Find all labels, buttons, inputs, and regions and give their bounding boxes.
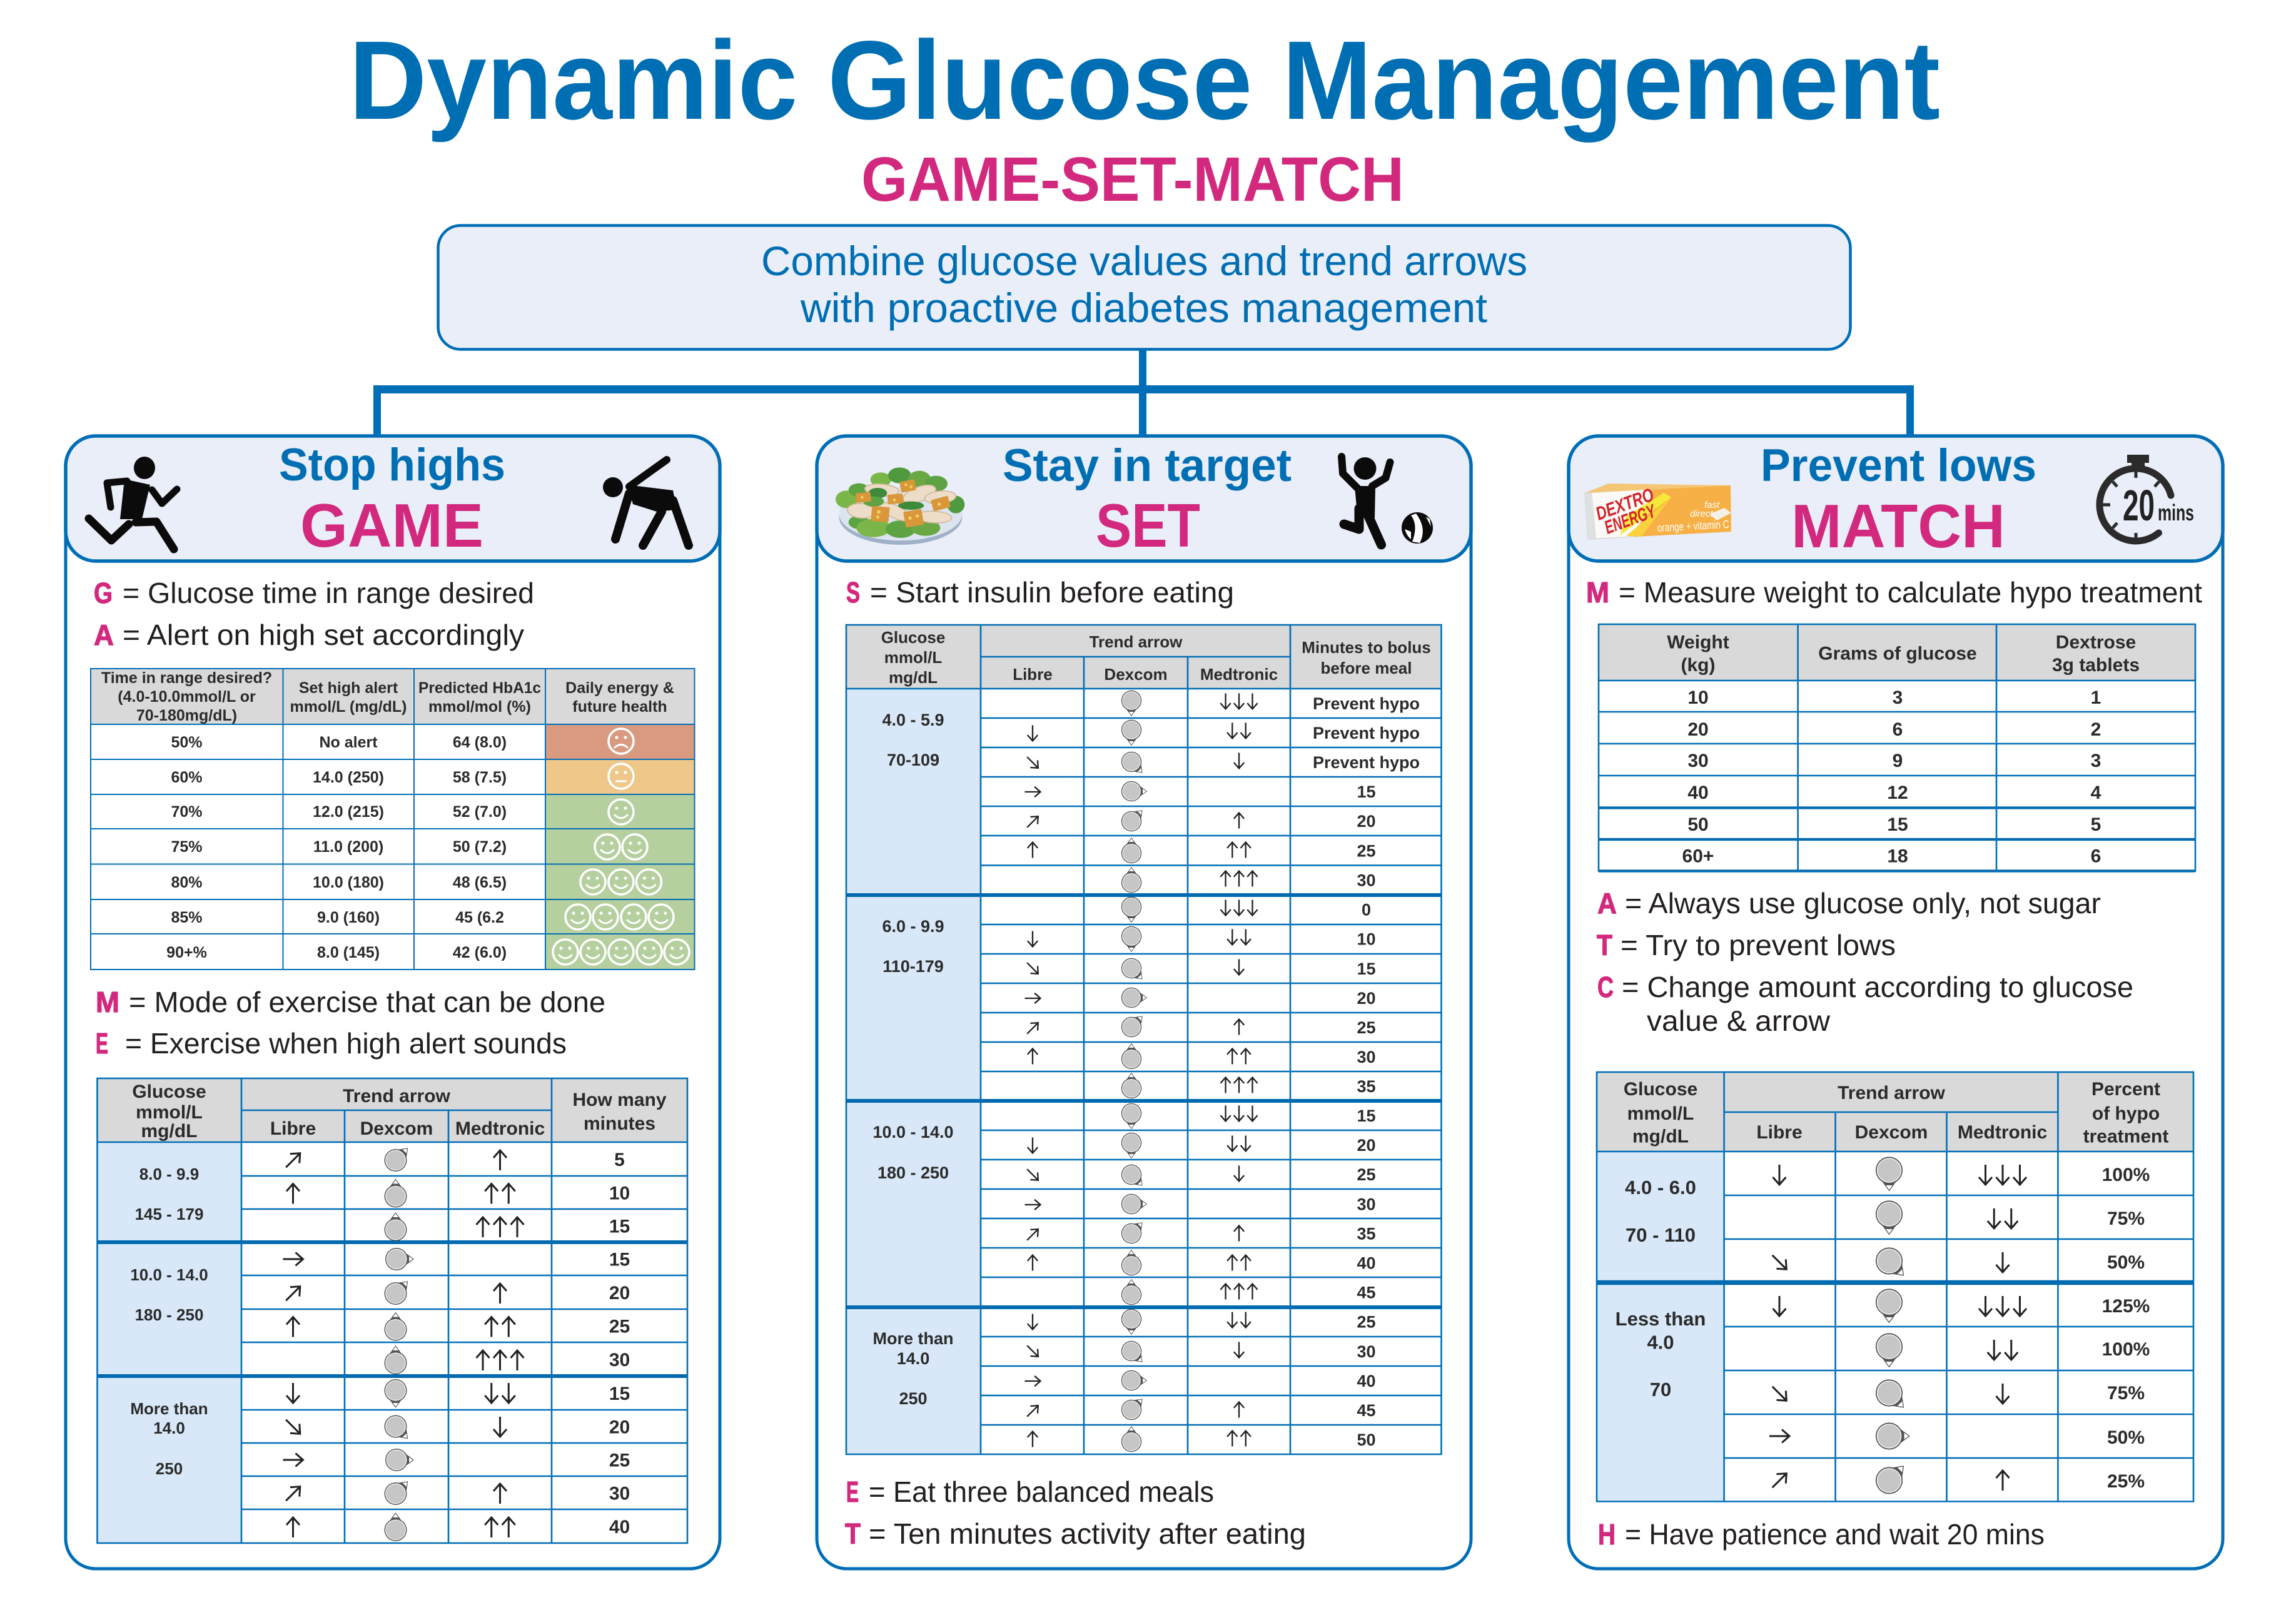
table: how many minutes: 25 bbox=[609, 1450, 630, 1471]
table: minutes to bolus: More than bbox=[872, 1329, 954, 1348]
table: minutes to bolus: 25 bbox=[1357, 1165, 1376, 1184]
icon: 20 minute stopwatch: mins bbox=[2158, 500, 2194, 525]
table: percent of hypo treatment: 4.0 bbox=[1647, 1331, 1674, 1354]
table: how many minutes: Dexcom bbox=[360, 1118, 433, 1139]
line: C: = Change amount according to glucose bbox=[1622, 971, 2133, 1003]
heading: MATCH: MATCH bbox=[1791, 492, 2005, 560]
table: minutes to bolus: mmol/L bbox=[884, 648, 942, 667]
heading: prevent lows: Prevent lows bbox=[1761, 440, 2036, 491]
table: time in range: 9.0 (160) bbox=[317, 909, 380, 926]
panel frame bbox=[817, 436, 1471, 1569]
table: minutes to bolus: 15 bbox=[1357, 1106, 1376, 1125]
line: S: = Start insulin before eating bbox=[870, 576, 1234, 609]
icon: salad plate bbox=[836, 467, 964, 545]
banner: combine glucose values: Combine glucose values and trend arrows bbox=[761, 238, 1527, 284]
line: E: = Eat three balanced meals bbox=[869, 1476, 1214, 1508]
table: weight and glucose: 6 bbox=[1893, 719, 1903, 740]
icon: neutral face bbox=[609, 764, 634, 789]
table: minutes to bolus: Trend arrow bbox=[1090, 632, 1183, 651]
icon: sad face bbox=[609, 729, 634, 754]
icon: dextro energy pack: fast bbox=[1704, 500, 1720, 510]
heading: stop highs: Stop highs bbox=[279, 440, 505, 490]
table: minutes to bolus: 250 bbox=[899, 1389, 928, 1408]
table: minutes to bolus: 30 bbox=[1357, 1342, 1376, 1361]
table: percent of hypo treatment: Glucose bbox=[1624, 1079, 1697, 1100]
table: minutes to bolus: 40 bbox=[1357, 1372, 1376, 1390]
icons: dexcom trend dials bbox=[1117, 691, 1150, 1452]
heading: GAME: GAME bbox=[300, 491, 483, 560]
table: minutes to bolus: 10.0 - 14.0 bbox=[872, 1123, 954, 1142]
table: percent of hypo treatment: treatment bbox=[2083, 1126, 2168, 1147]
line: M: = Mode of exercise that can be done bbox=[129, 986, 605, 1018]
table: percent of hypo treatment: 75% bbox=[2107, 1208, 2145, 1229]
table: time in range: mmol/mol (%) bbox=[428, 698, 531, 716]
icons: medtronic arrows bbox=[1979, 1165, 2026, 1491]
panel frame bbox=[66, 436, 720, 1569]
table: percent of hypo treatment: 125% bbox=[2102, 1296, 2150, 1317]
panel frame bbox=[1569, 436, 2223, 1569]
table: how many minutes: Libre bbox=[270, 1118, 316, 1139]
banner: combine glucose values bbox=[438, 225, 1850, 349]
table: time in range bbox=[91, 669, 694, 970]
table: minutes to bolus: before meal bbox=[1321, 659, 1412, 677]
table: minutes to bolus: 25 bbox=[1357, 1312, 1376, 1331]
table: weight and glucose: 2 bbox=[2091, 719, 2101, 740]
connector tree bbox=[373, 349, 1914, 436]
table: percent of hypo treatment: Percent bbox=[2091, 1079, 2160, 1100]
table: minutes to bolus: Prevent hypo bbox=[1313, 753, 1420, 772]
icons: libre arrows bbox=[1023, 726, 1042, 1447]
heading: SET: SET bbox=[1096, 491, 1200, 560]
icon: runner bbox=[89, 457, 177, 549]
table: percent of hypo treatment: 50% bbox=[2107, 1252, 2145, 1273]
table: minutes to bolus: 180 - 250 bbox=[877, 1163, 949, 1182]
table: time in range: 70% bbox=[171, 803, 203, 821]
panel: SET stay in target bbox=[817, 436, 1471, 1569]
table: minutes to bolus: Dexcom bbox=[1104, 665, 1168, 684]
table: time in range: 10.0 (180) bbox=[313, 874, 384, 891]
heading: stay in target: Stay in target bbox=[1003, 440, 1292, 491]
table: how many minutes: 30 bbox=[609, 1350, 630, 1370]
table: weight and glucose: 3 bbox=[1893, 687, 1903, 708]
table: minutes to bolus: 15 bbox=[1357, 782, 1376, 801]
table: how many minutes: 180 - 250 bbox=[135, 1305, 203, 1324]
table: minutes to bolus: 20 bbox=[1357, 1136, 1376, 1155]
icons: dexcom trend dials bbox=[1870, 1157, 1913, 1500]
line: T: T bbox=[1597, 929, 1612, 961]
table: time in range: 80% bbox=[171, 874, 203, 891]
table: minutes to bolus: 25 bbox=[1357, 1018, 1376, 1037]
line: E: E bbox=[96, 1027, 108, 1060]
table: how many minutes: mmol/L bbox=[136, 1102, 203, 1123]
line: G: = Glucose time in range desired bbox=[123, 577, 534, 609]
table: minutes to bolus: 70-109 bbox=[887, 751, 939, 769]
table: percent of hypo treatment: Less than bbox=[1616, 1308, 1706, 1330]
icons: libre arrows bbox=[1768, 1165, 1791, 1492]
table: how many minutes: 5 bbox=[614, 1150, 625, 1170]
subtitle: GAME-SET-MATCH bbox=[861, 144, 1404, 215]
table: minutes to bolus: 25 bbox=[1357, 842, 1376, 861]
line: C: C bbox=[1597, 971, 1614, 1003]
table: time in range: 58 (7.5) bbox=[453, 769, 507, 786]
table: minutes to bolus: 10 bbox=[1357, 929, 1376, 948]
table: how many minutes: 40 bbox=[609, 1517, 630, 1537]
table: weight and glucose: 5 bbox=[2091, 814, 2101, 835]
line: M: M bbox=[1586, 576, 1609, 609]
line: T: = Try to prevent lows bbox=[1621, 929, 1896, 961]
icon: child with ball bbox=[1342, 457, 1433, 545]
table: weight and glucose: 15 bbox=[1887, 814, 1908, 835]
table: weight and glucose: (kg) bbox=[1681, 655, 1715, 676]
table: minutes to bolus: 50 bbox=[1357, 1430, 1376, 1449]
table: how many minutes: 14.0 bbox=[153, 1419, 185, 1437]
table: minutes to bolus: 20 bbox=[1357, 989, 1376, 1008]
table: weight and glucose: 6 bbox=[2091, 846, 2101, 867]
table: time in range: No alert bbox=[319, 734, 378, 751]
table: time in range: Set high alert bbox=[299, 679, 398, 697]
table: minutes to bolus: 45 bbox=[1357, 1283, 1376, 1302]
table: weight and glucose: 40 bbox=[1687, 782, 1709, 803]
line: A: A bbox=[94, 619, 114, 651]
table: time in range: 85% bbox=[171, 909, 203, 926]
table: how many minutes: 10.0 - 14.0 bbox=[130, 1265, 208, 1284]
table: time in range: 90+% bbox=[166, 944, 207, 961]
table: weight and glucose: Weight bbox=[1667, 632, 1729, 653]
table: how many minutes: 20 bbox=[609, 1417, 630, 1437]
table: time in range: future health bbox=[572, 698, 667, 716]
table: time in range: 52 (7.0) bbox=[453, 803, 507, 821]
table: minutes to bolus: 45 bbox=[1357, 1401, 1376, 1420]
table: weight and glucose: 3 bbox=[2091, 751, 2101, 771]
table: percent of hypo treatment bbox=[1597, 1072, 2193, 1501]
table: how many minutes: More than bbox=[130, 1399, 208, 1418]
line: C bbox=[1597, 971, 2133, 1037]
table: how many minutes: How many bbox=[572, 1090, 667, 1110]
table: percent of hypo treatment: Medtronic bbox=[1958, 1122, 2047, 1143]
table: minutes to bolus bbox=[846, 625, 1441, 1454]
table: weight and glucose: 18 bbox=[1887, 846, 1908, 867]
table: time in range: 45 (6.2 bbox=[455, 909, 504, 926]
table: how many minutes: 30 bbox=[609, 1484, 630, 1504]
panel: MATCH prevent lows bbox=[1569, 436, 2223, 1569]
table: weight and glucose: 20 bbox=[1687, 719, 1709, 740]
table: percent of hypo treatment: 75% bbox=[2107, 1383, 2145, 1404]
table: weight and glucose: 3g tablets bbox=[2052, 655, 2140, 676]
table: how many minutes: 20 bbox=[609, 1283, 630, 1304]
line: T: = Ten minutes activity after eating bbox=[869, 1517, 1306, 1550]
table: how many minutes: 25 bbox=[609, 1316, 630, 1337]
panel: GAME stop highs bbox=[66, 436, 720, 1569]
table: minutes to bolus: mg/dL bbox=[889, 668, 938, 687]
table: time in range: 50 (7.2) bbox=[453, 838, 507, 856]
table: time in range: 8.0 (145) bbox=[317, 944, 380, 961]
table: minutes to bolus: 30 bbox=[1357, 1195, 1376, 1213]
table: weight and glucose: 4 bbox=[2091, 782, 2101, 803]
table: weight and glucose: 30 bbox=[1687, 751, 1709, 771]
table: how many minutes: 15 bbox=[609, 1384, 630, 1404]
icon: dextro energy pack: orange + vitamin C bbox=[1657, 518, 1729, 534]
table: weight and glucose: 60+ bbox=[1682, 846, 1714, 867]
table: weight and glucose: 10 bbox=[1687, 687, 1709, 708]
table: time in range: 14.0 (250) bbox=[313, 769, 384, 786]
icons: smiley rows bbox=[553, 799, 689, 965]
table: minutes to bolus: 30 bbox=[1357, 1048, 1376, 1066]
table: time in range: 12.0 (215) bbox=[313, 803, 384, 821]
table: percent of hypo treatment: Trend arrow bbox=[1838, 1083, 1946, 1103]
icon: 20 minute stopwatch bbox=[2100, 455, 2194, 541]
line: G: G bbox=[94, 577, 113, 609]
table: minutes to bolus: 6.0 - 9.9 bbox=[882, 917, 944, 936]
table: how many minutes bbox=[98, 1078, 687, 1543]
table: percent of hypo treatment: 100% bbox=[2102, 1339, 2150, 1360]
table: how many minutes: 15 bbox=[609, 1250, 630, 1270]
table: time in range: 70-180mg/dL) bbox=[136, 707, 237, 724]
table: percent of hypo treatment: 50% bbox=[2107, 1427, 2145, 1448]
table: how many minutes: 15 bbox=[609, 1216, 630, 1237]
table: minutes to bolus: 15 bbox=[1357, 959, 1376, 978]
icons: medtronic arrows bbox=[1220, 694, 1258, 1446]
line: A: = Always use glucose only, not sugar bbox=[1625, 887, 2101, 919]
line: C: value & arrow bbox=[1647, 1005, 1831, 1037]
line: M: = Measure weight to calculate hypo treatment bbox=[1619, 576, 2202, 609]
table: time in range: 75% bbox=[171, 838, 203, 856]
title: Dynamic Glucose Management bbox=[349, 18, 1940, 143]
table: minutes to bolus: 0 bbox=[1362, 901, 1371, 919]
table: time in range: (4.0-10.0mmol/L or bbox=[118, 688, 256, 706]
line: H: H bbox=[1598, 1518, 1616, 1551]
table: weight and glucose bbox=[1599, 624, 2195, 871]
table: how many minutes: 10 bbox=[609, 1183, 630, 1203]
line: T: T bbox=[845, 1517, 861, 1550]
line: A: = Alert on high set accordingly bbox=[123, 619, 524, 651]
table: percent of hypo treatment: Libre bbox=[1756, 1122, 1803, 1143]
table: how many minutes: 145 - 179 bbox=[135, 1205, 203, 1223]
table: time in range: 11.0 (200) bbox=[313, 838, 383, 856]
table: minutes to bolus: Prevent hypo bbox=[1313, 694, 1420, 713]
line: E: = Exercise when high alert sounds bbox=[125, 1027, 567, 1060]
table: how many minutes: Trend arrow bbox=[343, 1086, 451, 1106]
table: weight and glucose: 1 bbox=[2091, 687, 2101, 708]
table: minutes to bolus: 4.0 - 5.9 bbox=[882, 711, 944, 729]
table: time in range: mmol/L (mg/dL) bbox=[290, 698, 407, 716]
table: minutes to bolus: Glucose bbox=[881, 628, 945, 647]
table: time in range: 64 (8.0) bbox=[453, 734, 507, 751]
icon: dextro energy pack: DEXTRO bbox=[1593, 485, 1657, 525]
table: minutes to bolus: 30 bbox=[1357, 871, 1376, 889]
icon: dextro energy pack bbox=[1585, 484, 1731, 539]
table: minutes to bolus: Libre bbox=[1013, 665, 1053, 684]
table: how many minutes: 8.0 - 9.9 bbox=[139, 1165, 199, 1183]
table: percent of hypo treatment: mmol/L bbox=[1627, 1103, 1694, 1124]
line: E: E bbox=[846, 1476, 859, 1508]
icon: dextro energy pack: ENERGY bbox=[1602, 500, 1659, 539]
table: percent of hypo treatment: 70 - 110 bbox=[1626, 1224, 1696, 1246]
table: minutes to bolus: Prevent hypo bbox=[1313, 724, 1420, 742]
table: minutes to bolus: 20 bbox=[1357, 812, 1376, 831]
table: time in range: Predicted HbA1c bbox=[418, 679, 541, 697]
table: minutes to bolus: 14.0 bbox=[897, 1349, 929, 1368]
banner: combine glucose values: with proactive diabetes management bbox=[800, 285, 1487, 331]
table: minutes to bolus: 110-179 bbox=[882, 957, 944, 976]
panel header band bbox=[1569, 436, 2223, 561]
table: time in range: 60% bbox=[171, 769, 203, 786]
table: weight and glucose: 12 bbox=[1887, 782, 1908, 803]
table: minutes to bolus: 35 bbox=[1357, 1225, 1376, 1243]
table: minutes to bolus: Minutes to bolus bbox=[1302, 638, 1431, 657]
icon: dextro energy pack: direct bbox=[1690, 509, 1714, 519]
table: percent of hypo treatment: 4.0 - 6.0 bbox=[1625, 1177, 1696, 1198]
table: time in range: 48 (6.5) bbox=[453, 874, 507, 891]
line: H: = Have patience and wait 20 mins bbox=[1625, 1518, 2045, 1551]
table: minutes to bolus: 35 bbox=[1357, 1077, 1376, 1096]
table: minutes to bolus: Medtronic bbox=[1200, 665, 1278, 684]
table: how many minutes: mg/dL bbox=[141, 1121, 198, 1142]
table: how many minutes: Medtronic bbox=[455, 1118, 545, 1139]
table: minutes to bolus: 40 bbox=[1357, 1253, 1376, 1272]
icon: 20 minute stopwatch: 20 bbox=[2123, 481, 2155, 530]
icons: medtronic arrows bbox=[477, 1150, 524, 1537]
panel header band bbox=[66, 436, 720, 561]
table: how many minutes: minutes bbox=[584, 1113, 655, 1134]
table: weight and glucose: 50 bbox=[1687, 814, 1709, 835]
table: percent of hypo treatment: 70 bbox=[1650, 1379, 1671, 1400]
line: S: S bbox=[846, 576, 860, 609]
table: time in range: 42 (6.0) bbox=[453, 944, 507, 961]
table: how many minutes: Glucose bbox=[132, 1081, 206, 1102]
icon: stretching figure bbox=[603, 460, 689, 545]
icons: libre arrows bbox=[281, 1148, 305, 1537]
table: weight and glucose: Dextrose bbox=[2056, 632, 2136, 653]
table: weight and glucose: 9 bbox=[1893, 751, 1903, 771]
table: percent of hypo treatment: 100% bbox=[2102, 1165, 2150, 1185]
table: percent of hypo treatment: mg/dL bbox=[1632, 1126, 1689, 1147]
table: how many minutes: 250 bbox=[156, 1459, 183, 1478]
table: time in range: Daily energy & bbox=[565, 679, 674, 697]
table: time in range: 50% bbox=[171, 734, 203, 751]
line: A: A bbox=[1597, 887, 1617, 919]
table: percent of hypo treatment: of hypo bbox=[2092, 1103, 2160, 1124]
table: weight and glucose: Grams of glucose bbox=[1818, 643, 1977, 664]
icons: dexcom trend dials bbox=[380, 1140, 415, 1541]
line: M: M bbox=[96, 986, 119, 1018]
table: time in range: Time in range desired? bbox=[101, 669, 272, 687]
table: percent of hypo treatment: 25% bbox=[2107, 1471, 2145, 1492]
panel header band bbox=[817, 436, 1471, 561]
table: percent of hypo treatment: Dexcom bbox=[1855, 1122, 1928, 1143]
